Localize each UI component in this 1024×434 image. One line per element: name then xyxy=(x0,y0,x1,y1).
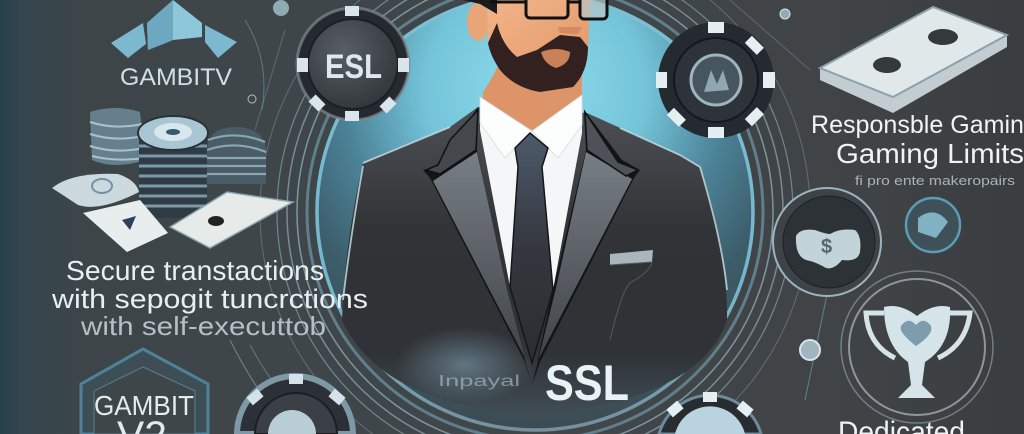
ear xyxy=(467,3,489,41)
badge: Gambit V2 xyxy=(81,349,208,434)
left lapel xyxy=(423,107,532,385)
glasses xyxy=(490,0,607,19)
chip: top right icon xyxy=(656,22,775,138)
chip: ESL: ESL xyxy=(325,48,382,86)
suit jacket xyxy=(342,107,727,415)
chip: ESL xyxy=(297,6,409,121)
central figure xyxy=(342,0,727,415)
right lapel xyxy=(532,110,640,385)
right card xyxy=(170,192,293,248)
centre stack xyxy=(138,116,208,218)
logo wordmark: GAMBITV xyxy=(120,64,232,91)
text block: responsible gaming: Responsble Gamin xyxy=(811,111,1024,139)
node dots xyxy=(248,0,820,360)
text block: secure transactions: with self-executtob xyxy=(80,311,326,341)
icon: banknote xyxy=(820,7,1007,113)
icon: chip stacks and cards xyxy=(52,108,293,252)
tie xyxy=(510,133,553,363)
logo: GambitV xyxy=(111,0,237,91)
text block: secure transactions xyxy=(51,255,368,341)
ring system around the figure xyxy=(230,0,830,434)
chest glow xyxy=(395,327,535,403)
text block: responsible gaming: fi pro ente makeropairs xyxy=(855,173,1016,188)
nose xyxy=(558,27,582,34)
icon: shield hand badge xyxy=(906,198,960,252)
face xyxy=(487,0,590,92)
neck xyxy=(483,66,582,132)
shoulder highlight xyxy=(343,127,727,300)
chip: bottom left xyxy=(237,374,353,434)
text block: secure transactions: Secure transtactions xyxy=(66,255,324,286)
pocket square xyxy=(610,250,653,265)
text block: secure transactions: with sepogit tuncrctions xyxy=(51,284,368,314)
collar xyxy=(480,95,582,158)
central SSL label: SSL xyxy=(545,355,629,411)
text block: responsible gaming xyxy=(811,111,1024,188)
badge: Gambit V2: GAMBIT xyxy=(94,390,194,421)
back left stack xyxy=(90,108,145,165)
lip and chin patch xyxy=(541,49,570,68)
icon: logo mark xyxy=(111,0,237,58)
right stack xyxy=(207,127,266,184)
beard xyxy=(488,23,588,92)
note xyxy=(52,174,139,207)
icon: trophy with heart xyxy=(841,271,993,423)
chip: money handshake xyxy=(773,188,881,296)
text block: responsible gaming: Gaming Limits xyxy=(836,138,1024,169)
chip: money handshake: $ xyxy=(821,236,832,258)
hair xyxy=(463,0,497,14)
chip: bottom centre right xyxy=(659,392,761,434)
left card xyxy=(83,200,168,252)
shirt xyxy=(480,95,582,290)
faint garbled label on chest: Inpayal xyxy=(438,373,520,390)
